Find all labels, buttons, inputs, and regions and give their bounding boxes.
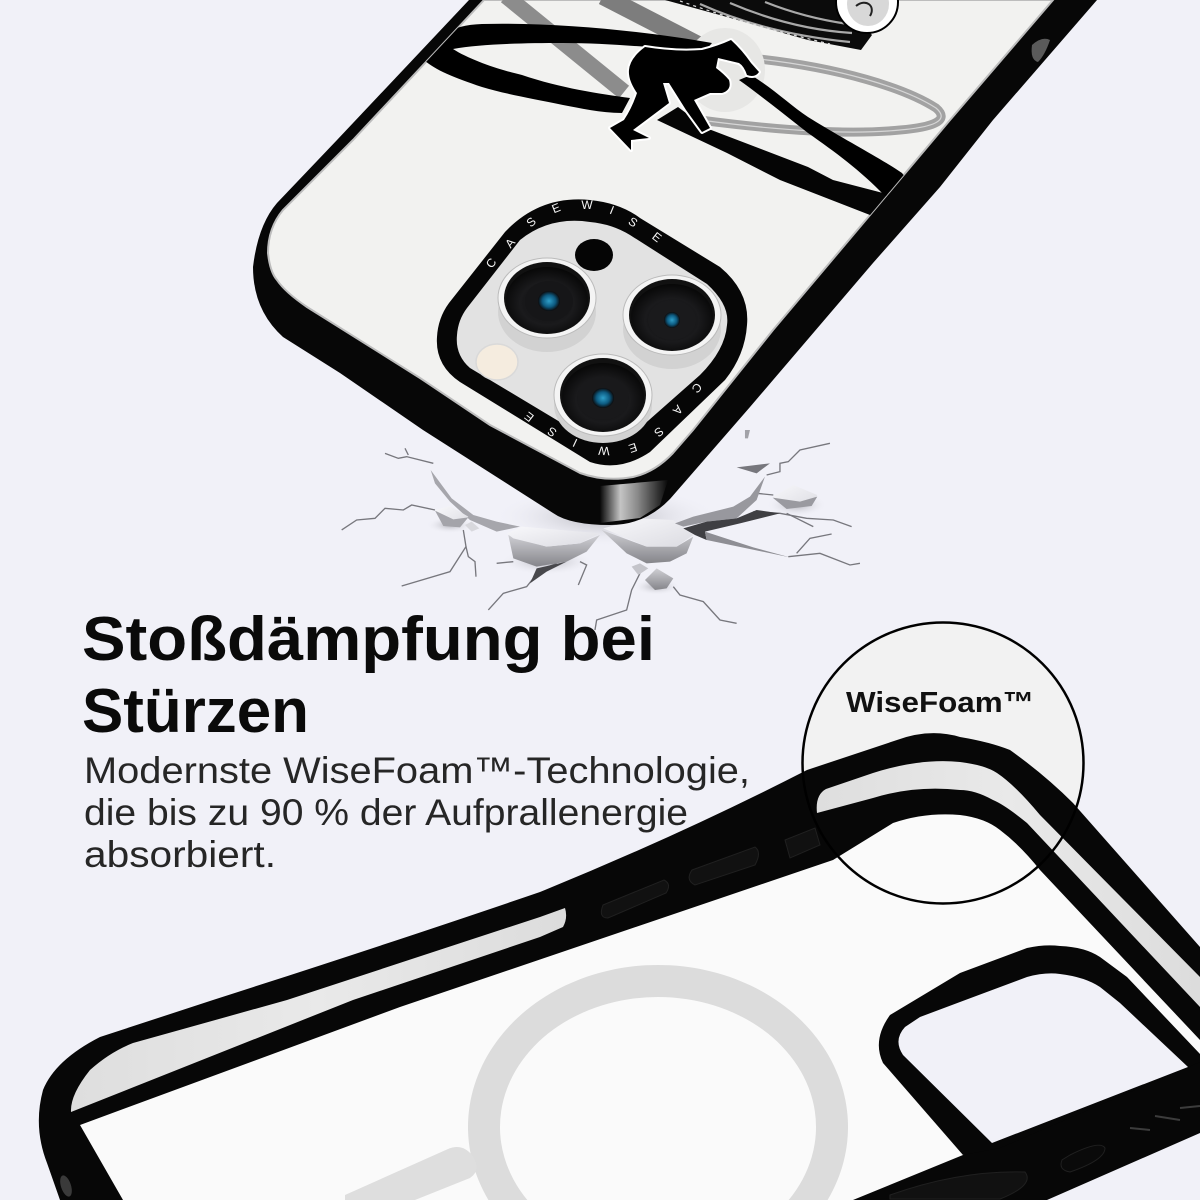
ring lettering: CASEWISE bottom: S [545,424,559,440]
ring lettering: CASEWISE top: A [502,236,518,251]
case frame [39,733,1200,1200]
back panel [268,0,1053,479]
ground cracks [342,430,860,630]
soft halo [696,28,765,112]
ring lettering: CASEWISE bottom: S [651,424,666,440]
camera island [457,221,727,441]
chunk left top [507,527,600,547]
description text [84,750,750,875]
side button on bumper [1032,39,1050,62]
small rocks bottom [632,563,648,575]
left side port [58,1174,74,1198]
top phone with case [253,0,1097,525]
ring lettering: CASEWISE bottom: A [670,402,686,418]
chunk left side [508,535,600,567]
mic hole [575,239,613,271]
clear back [80,814,1200,1200]
case frame: black bumper [253,0,1097,525]
magnifier label: WiseFoam™ [846,687,1034,719]
lens 3 [554,354,652,443]
rock right [773,485,817,508]
description text: Modernste WiseFoam™-Technologie, [84,750,750,791]
lens 2 [623,275,721,369]
upper right slot [817,761,1200,1007]
sliver under phone [745,430,750,438]
ring lettering: CASEWISE bottom: I [571,436,580,450]
ring lettering: CASEWISE bottom: W [597,443,610,458]
ring lettering: CASEWISE bottom: C [689,380,705,396]
flash [476,344,518,380]
wedge slab [705,532,790,557]
running figure [610,40,759,150]
back print [424,0,941,225]
ring lettering: CASEWISE top: E [649,229,664,245]
dark triangle [737,463,770,473]
lower right reflections [1130,1106,1200,1130]
side buttons [601,828,1105,1199]
ring lettering: CASEWISE bottom: E [627,440,639,456]
camera cutout rim [879,945,1200,1155]
ring lettering: CASEWISE top: E [550,200,562,216]
eye sphere [836,0,898,33]
chunk right side [602,530,693,563]
alignment pill [345,1147,477,1200]
ring lettering: CASEWISE top [483,198,664,271]
ring lettering: CASEWISE top: W [581,198,593,212]
saucer [665,0,898,50]
bottom phone case [39,733,1200,1200]
magnifier circle outline [802,622,1084,904]
crack lines [342,443,860,630]
gray bands [506,0,624,92]
dark gap [683,510,780,540]
left plate rim [431,470,520,532]
ring lettering: CASEWISE top: C [483,255,500,271]
heading: Stürzen [82,677,309,746]
heading: Stoßdämpfung bei [82,605,655,674]
camera module [437,198,747,465]
ring lettering: CASEWISE top: I [608,203,616,217]
description text: die bis zu 90 % der Aufprallenergie [84,792,688,833]
MagSafe ring [468,965,848,1200]
chunk right top [603,518,693,547]
ring lettering: CASEWISE top: S [626,214,640,230]
right plate rim [675,477,765,527]
magnifier circle background [803,623,1083,903]
bumper glare [600,480,668,523]
heading [82,605,655,746]
camera cutout [898,973,1188,1143]
lens 1 [498,258,596,352]
rubble shadows [493,487,720,547]
ring lettering: CASEWISE top: S [523,214,539,230]
black orbit bands [424,24,712,113]
left slot [71,908,566,1112]
ring lettering: CASEWISE bottom [522,380,705,458]
rubble left [435,506,468,527]
description text: absorbiert. [84,834,276,875]
camera bumper ring [437,199,747,465]
ring lettering: CASEWISE bottom: E [522,409,537,425]
